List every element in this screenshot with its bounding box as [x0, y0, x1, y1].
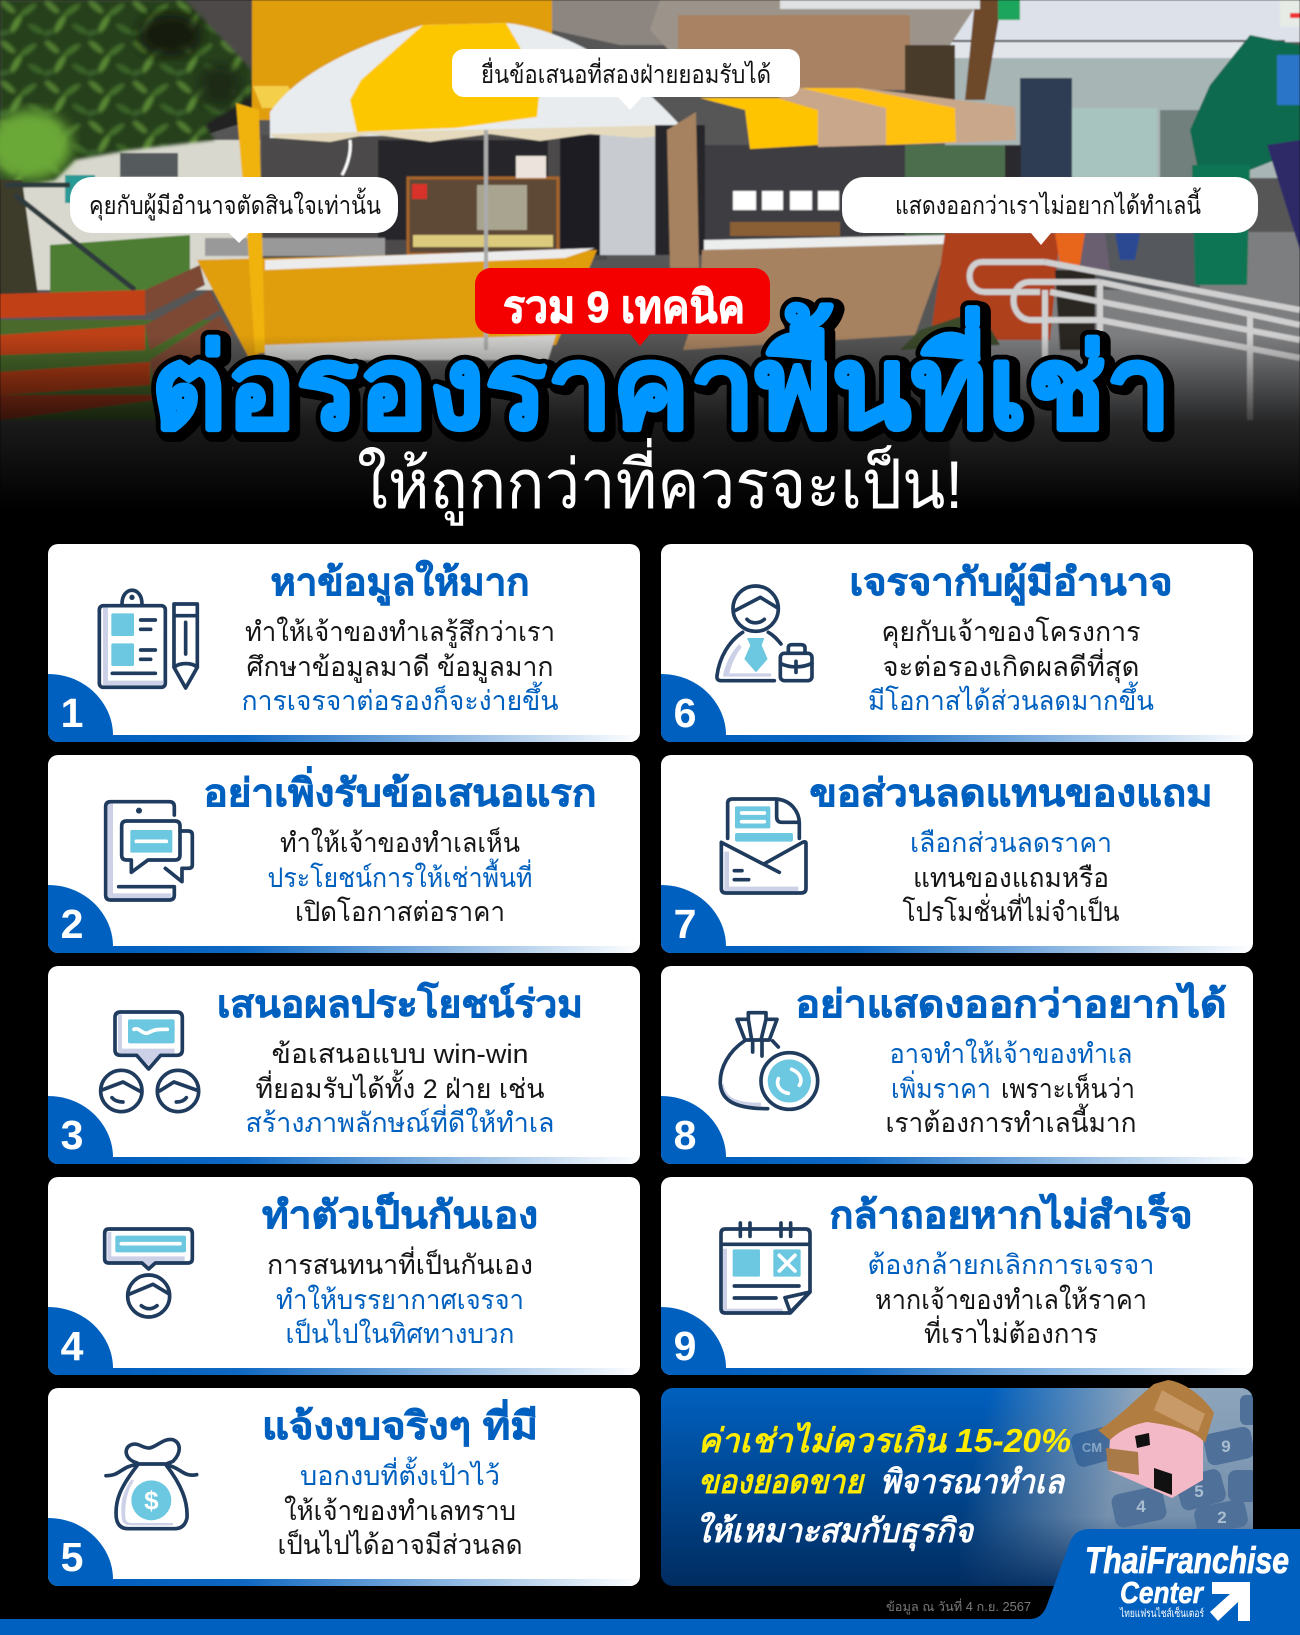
hero photo: food kiosks — [0, 0, 1300, 520]
card 9 — [661, 1177, 1253, 1375]
card 5: 5 — [61, 1534, 83, 1580]
main title: ต่อรองราคาพื้นที่เช่า — [151, 303, 1171, 453]
card 6 — [661, 544, 1253, 742]
card 8: อาจทำให้เจ้าของทำเล — [890, 1038, 1132, 1069]
card 1: 1 — [61, 690, 83, 736]
speech bubble: right: แสดงออกว่าเราไม่อยากได้ทำเลนี้ — [895, 187, 1201, 220]
lower black area — [0, 509, 1300, 539]
red tag: 9 techniques — [475, 268, 770, 346]
card 5: บอกงบที่ตั้งเป้าไว้ — [300, 1456, 500, 1491]
card 2: อย่าเพิ่งรับข้อเสนอแรก — [204, 766, 596, 815]
icon: envelope with document — [721, 799, 806, 893]
card 7 — [661, 755, 1253, 953]
calculator photo: 5 — [1194, 1482, 1204, 1501]
calculator photo: 4 — [1136, 1497, 1146, 1516]
card 8 — [661, 966, 1253, 1164]
speech bubble: right — [842, 177, 1258, 245]
card 7: เลือกส่วนลดราคา — [910, 828, 1112, 858]
card 2 — [48, 755, 640, 953]
card 5: ให้เจ้าของทำเลทราบ — [284, 1495, 516, 1526]
card 3: 3 — [61, 1112, 83, 1158]
photo dark fade — [0, 335, 1300, 510]
card 4: เป็นไปในทิศทางบวก — [286, 1316, 514, 1349]
body left — [197, 250, 597, 360]
card 9: ที่เราไม่ต้องการ — [924, 1315, 1098, 1349]
card 1: หาข้อมูลให้มาก — [270, 560, 530, 606]
callout text — [695, 1421, 1071, 1552]
icon: logo arrow — [1210, 1582, 1250, 1621]
card 4: 4 — [61, 1323, 84, 1369]
mascot — [1190, 35, 1300, 170]
kiosk wall behind — [252, 0, 552, 120]
card 1: การเจรจาต่อรองก็จะง่ายขึ้น — [242, 681, 558, 716]
card 5 — [48, 1388, 640, 1586]
main title: ต่อรองราคาพื้นที่เช่า — [151, 303, 1171, 453]
panel: rent advice callout — [661, 1380, 1258, 1586]
icon: two people talking — [101, 1012, 199, 1112]
red tag: 9 techniques: รวม 9 เทคนิค — [503, 283, 745, 332]
card 8: เราต้องการทำเลนี้มาก — [886, 1103, 1136, 1138]
card 4: ทำตัวเป็นกันเอง — [262, 1192, 538, 1237]
card 5: เป็นไปได้อาจมีส่วนลด — [278, 1527, 522, 1560]
card 9: หากเจ้าของทำเลให้ราคา — [875, 1284, 1147, 1315]
speech bubble: left: คุยกับผู้มีอำนาจตัดสินใจเท่านั้น — [89, 187, 381, 221]
card 3: ที่ยอมรับได้ทั้ง 2 ฝ่าย เช่น — [256, 1069, 544, 1104]
card 8: เพิ่มราคา — [891, 1070, 991, 1104]
card 9: 9 — [674, 1323, 696, 1369]
speech bubble: top — [452, 49, 800, 110]
card 7: 7 — [674, 901, 696, 947]
main title: ต่อรองราคาพื้นที่เช่า — [155, 306, 1175, 456]
card 9: ต้องกล้ายกเลิกการเจรจา — [868, 1250, 1154, 1280]
icon: clipboard and pencil — [99, 590, 197, 688]
card 8: 8 — [674, 1112, 696, 1158]
source note: ข้อมูล ณ วันที่ 4 ก.ย. 2567 — [886, 1598, 1031, 1615]
card 6: จะต่อรองเกิดผลดีที่สุด — [882, 648, 1140, 684]
callout text: ค่าเช่าไม่ควรเกิน 15-20% — [698, 1421, 1071, 1459]
icon: tablet chat — [106, 802, 192, 900]
card 7: โปรโมชั่นที่ไม่จำเป็น — [902, 893, 1120, 927]
card 3: ข้อเสนอแบบ win-win — [272, 1039, 528, 1069]
card 3 — [48, 966, 640, 1164]
card 2: 2 — [61, 901, 83, 947]
card 7: แทนของแถมหรือ — [913, 863, 1109, 893]
card 9: กล้าถอยหากไม่สำเร็จ — [830, 1192, 1192, 1237]
umbrella — [253, 86, 300, 108]
callout text: ของยอดขาย — [698, 1463, 865, 1500]
display case — [408, 178, 558, 254]
calculator photo: 2 — [1217, 1508, 1227, 1527]
calculator photo: 9 — [1221, 1437, 1231, 1456]
card 6: เจรจากับผู้มีอำนาจ — [850, 562, 1172, 606]
icon: model house — [1098, 1380, 1214, 1498]
icon: money bag: $ — [144, 1485, 159, 1515]
card 7: ขอส่วนลดแทนของแถม — [810, 773, 1212, 815]
card 1: ทำให้เจ้าของทำเลรู้สึกว่าเรา — [245, 616, 555, 648]
speech bubble: left — [70, 177, 398, 243]
yellow post — [236, 103, 265, 353]
card 6: มีโอกาสได้ส่วนลดมากขึ้น — [868, 681, 1154, 716]
card 6: คุยกับเจ้าของโครงการ — [882, 617, 1140, 649]
card 2: เปิดโอกาสต่อราคา — [295, 897, 505, 927]
card 2: ทำให้เจ้าของทำเลเห็น — [280, 825, 520, 858]
icon: calendar — [721, 1223, 810, 1313]
card 3: เสนอผลประโยชน์ร่วม — [217, 981, 583, 1026]
card 4: การสนทนาที่เป็นกันเอง — [267, 1246, 533, 1280]
card 2: ประโยชน์การให้เช่าพื้นที่ — [268, 858, 532, 893]
callout text: พิจารณาทำเล — [880, 1463, 1066, 1500]
card 8: เพราะเห็นว่า — [1001, 1071, 1135, 1104]
ground right — [950, 232, 1300, 520]
card 4 — [48, 1177, 640, 1375]
icon: coin bag — [720, 1013, 818, 1109]
card 5: แจ้งงบจริงๆ ที่มี — [262, 1399, 538, 1448]
icon: businessperson with briefcase — [717, 586, 812, 681]
card 1 — [48, 544, 640, 742]
calculator photo — [960, 1388, 1258, 1586]
subtitle: ให้ถูกกว่าที่ควรจะเป็น! — [357, 438, 963, 526]
icon: person speaking — [105, 1229, 192, 1317]
footer band and logo — [0, 1529, 1300, 1635]
brown kiosk — [650, 0, 980, 60]
icon: money bag — [106, 1439, 197, 1529]
speech bubble: top: ยื่นข้อเสนอที่สองฝ่ายยอมรับได้ — [481, 57, 771, 89]
footer band and logo: Center — [1120, 1575, 1205, 1610]
footer band and logo: ไทยแฟรนไชส์เซ็นเตอร์ — [1119, 1606, 1204, 1620]
right building — [950, 0, 1300, 42]
card 8: อย่าแสดงออกว่าอยากได้ — [796, 982, 1226, 1026]
card 1: ศึกษาข้อมูลมาดี ข้อมูลมาก — [246, 652, 554, 683]
callout text: ให้เหมาะสมกับธุรกิจ — [695, 1511, 975, 1552]
card 3: สร้างภาพลักษณ์ที่ดีให้ทำเล — [246, 1104, 554, 1138]
card 6: 6 — [674, 690, 696, 736]
steel rails — [970, 262, 1300, 420]
calculator photo: CM — [1082, 1440, 1102, 1455]
card 4: ทำให้บรรยากาศเจรจา — [276, 1284, 524, 1315]
